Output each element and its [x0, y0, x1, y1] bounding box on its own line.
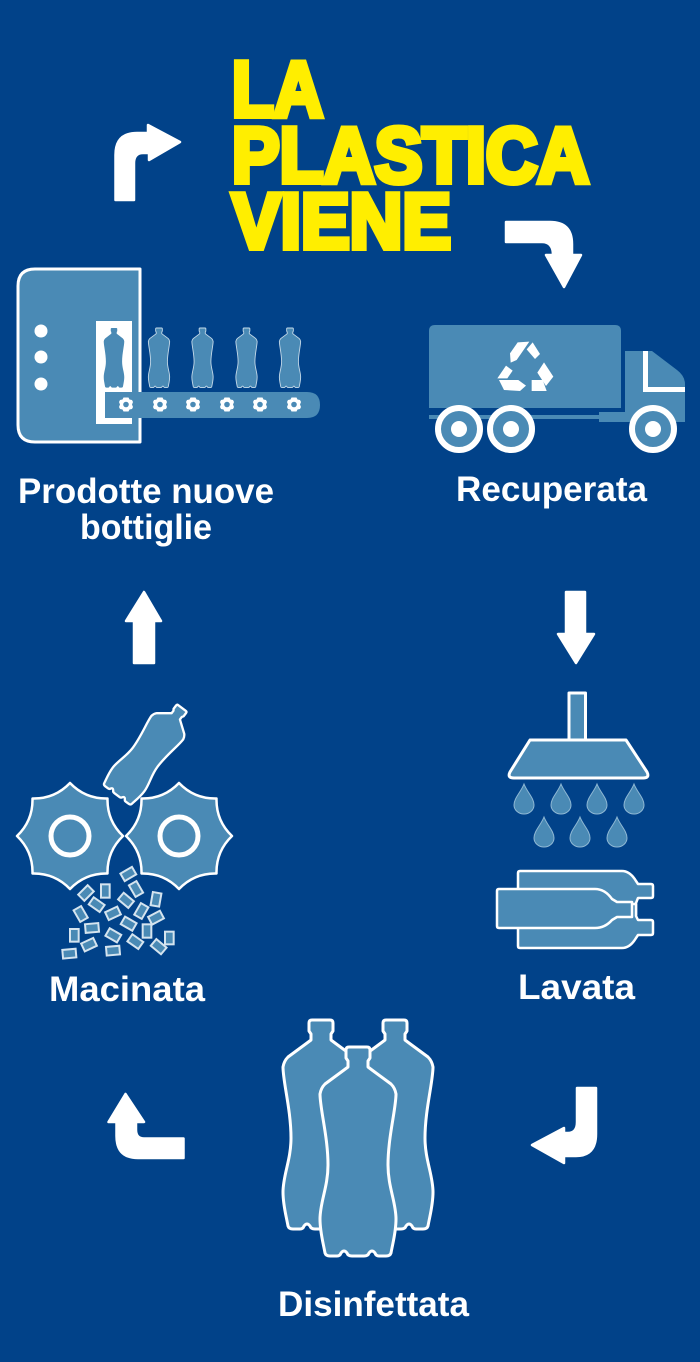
arrow: to new bottles [126, 592, 161, 663]
label: Prodotte nuove bottiglie [18, 472, 274, 547]
icon: bottling machine [18, 269, 320, 442]
icon: grinder [17, 696, 232, 959]
icon: washed bottles [497, 871, 653, 948]
arrow: to title [116, 125, 180, 200]
truck wheels [438, 408, 674, 450]
machine buttons [34, 324, 48, 390]
plastic flakes [62, 867, 174, 959]
truck cargo box [429, 325, 621, 408]
icon: disinfected bottles [283, 1020, 433, 1256]
label: Lavata: Lavata [518, 968, 636, 1007]
conveyor cogs [119, 398, 301, 412]
icon: shower [509, 693, 648, 847]
truck cab [625, 351, 685, 422]
label: Disinfettata: Disinfettata [278, 1285, 470, 1324]
label: Prodotte nuove bottiglie: Prodotte nuove [18, 472, 274, 511]
left gear [17, 783, 123, 889]
recycling symbol [497, 342, 553, 391]
conveyor bottles [148, 328, 301, 388]
arrow: to truck [506, 222, 581, 287]
cab window frame [643, 351, 685, 392]
arrow: to disinfection [532, 1088, 596, 1163]
shower head [509, 740, 648, 778]
right gear [126, 783, 232, 889]
icon: truck [429, 325, 685, 450]
arrow: to grinder [108, 1094, 184, 1158]
plastic bottle entering grinder [101, 696, 198, 807]
title [232, 45, 589, 265]
machine window [96, 321, 132, 424]
conveyor belt [105, 392, 320, 418]
label: Macinata: Macinata [49, 970, 206, 1009]
title: LA [232, 45, 323, 133]
arrow: to shower [558, 592, 594, 663]
title: VIENE [232, 177, 451, 265]
water drops [514, 784, 644, 847]
title: PLASTICA [232, 111, 589, 199]
truck chassis [429, 412, 630, 422]
wheel hubs [451, 421, 661, 437]
shower pipe [569, 693, 586, 741]
label: Prodotte nuove bottiglie: bottiglie [80, 508, 212, 547]
label: Recuperata: Recuperata [456, 470, 648, 509]
bottle in window [104, 328, 124, 388]
machine body [18, 269, 140, 442]
